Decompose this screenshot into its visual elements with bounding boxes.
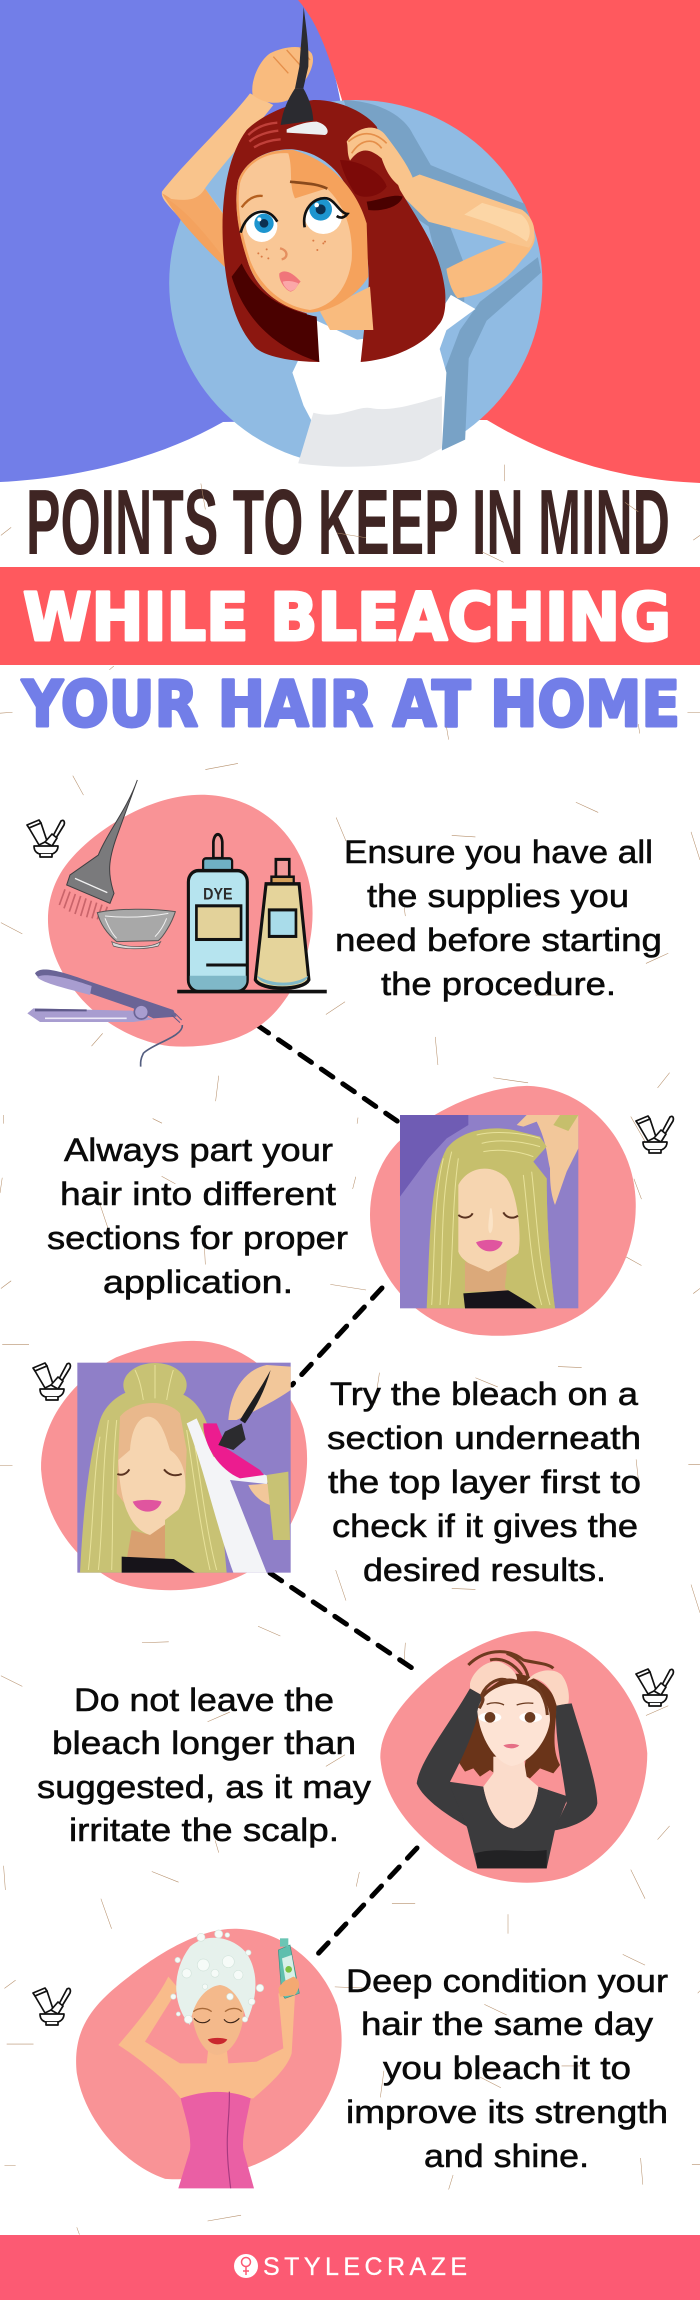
dashed connector 1 — [257, 1025, 400, 1123]
panel 4 text: bleach longer than — [52, 1725, 356, 1761]
panel 1 comb, bowl and straightener — [27, 780, 182, 1067]
panel 1: supplies illustration — [27, 780, 327, 1067]
panel 2 text: hair into different — [60, 1176, 336, 1212]
footer bar — [0, 2235, 700, 2300]
panel 5 text: and shine. — [424, 2138, 589, 2174]
panel 3 text: section underneath — [327, 1420, 641, 1456]
panel 4 text: irritate the scalp. — [69, 1812, 339, 1848]
panel 3 text: check if it gives the — [332, 1508, 638, 1544]
panel 2 text: Always part your — [64, 1132, 333, 1168]
panel 2 tool icon — [636, 1116, 673, 1153]
brush — [295, 7, 309, 88]
panel 3 text — [327, 1376, 641, 1588]
panel 1 blob and bottles — [48, 795, 327, 1047]
photo: foil application — [77, 1363, 291, 1573]
title line 2: WHILE BLEACHING — [23, 579, 671, 656]
icon: dye bottle — [188, 834, 247, 991]
woman holding head — [417, 1652, 597, 1868]
title band — [0, 567, 700, 665]
panel 5 text: improve its strength — [346, 2094, 668, 2130]
panel 3 blob — [41, 1341, 307, 1590]
panel 1 text — [335, 834, 662, 1002]
right hand — [347, 128, 413, 189]
panel 1 text: need before starting — [335, 922, 662, 958]
panel 2 blob — [370, 1086, 636, 1336]
panel 4 blob — [380, 1631, 647, 1883]
panel 5: conditioning illustration — [76, 1929, 342, 2188]
panel 5 text: Deep condition your — [346, 1963, 668, 1999]
head and raised arms — [162, 7, 445, 362]
icon: comb — [59, 780, 137, 919]
panel 3 text: desired results. — [363, 1552, 606, 1588]
woman with foam — [118, 1930, 299, 2188]
panel 5 text: hair the same day — [361, 2006, 653, 2042]
dashed connector 4 — [315, 1848, 417, 1957]
panel 1 tool icon — [27, 820, 64, 857]
panel 5 text: you bleach it to — [383, 2050, 631, 2086]
photo: woman parting hair — [400, 1115, 578, 1308]
panel 4: irritated scalp illustration — [380, 1631, 647, 1883]
panel 3: strand test illustration — [41, 1341, 307, 1590]
panel 4 text: suggested, as it may — [37, 1769, 371, 1805]
panel 2: sectioning illustration — [370, 1086, 636, 1336]
icon: hair straightener — [27, 970, 182, 1067]
panel 5 blob — [76, 1929, 342, 2179]
hero illustration: woman applying dye — [162, 7, 542, 467]
scattered hair strands — [0, 465, 700, 2235]
panel 4 text — [37, 1682, 371, 1848]
panel 3 text: Try the bleach on a — [330, 1376, 638, 1412]
panel 3 text: the top layer first to — [328, 1464, 641, 1500]
panel 1 text: the procedure. — [381, 966, 616, 1002]
icon: bowl — [97, 909, 175, 949]
panel 5 text — [346, 1963, 668, 2174]
dashed connector 3 — [270, 1573, 415, 1670]
icon: cream tube — [255, 859, 309, 988]
dashed connector 2 — [292, 1288, 382, 1385]
blue circle and shirt — [169, 100, 542, 467]
panel 2 text — [47, 1132, 348, 1300]
hero background — [0, 0, 700, 490]
panel 4 text: Do not leave the — [74, 1682, 334, 1718]
panel 4 tool icon — [636, 1669, 673, 1706]
panel 2 text: sections for proper — [47, 1220, 348, 1256]
panel 1 text: the supplies you — [367, 878, 629, 914]
footer logo — [234, 2254, 258, 2278]
eyes — [246, 210, 277, 242]
panel 1 text: Ensure you have all — [344, 834, 653, 870]
icon: dye bottle: DYE — [203, 886, 233, 904]
panel 3 tool icon — [33, 1363, 70, 1400]
panel 5 tool icon — [33, 1988, 70, 2025]
footer brand: STYLECRAZE — [263, 2253, 467, 2281]
panel 2 text: application. — [103, 1264, 293, 1300]
